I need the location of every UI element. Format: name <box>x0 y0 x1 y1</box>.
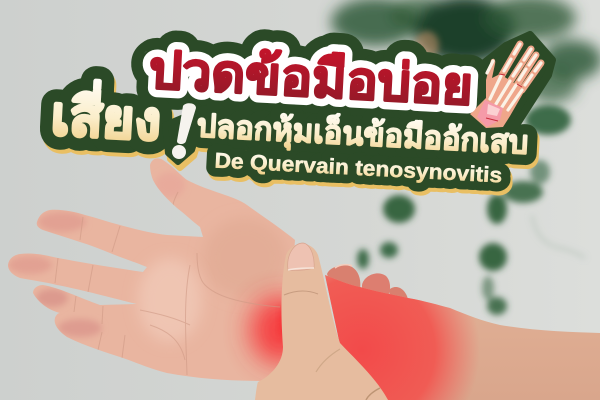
title line 2: condition: ปลอกหุ้มเอ็นข้อมืออักเสบ <box>196 105 529 164</box>
green sticker backing: ปวดข้อมือบ่อย <box>148 42 474 116</box>
exclamation mark <box>172 103 196 159</box>
gold drop shadow of sticker: ปลอกหุ้มเอ็นข้อมืออักเสบ <box>198 109 531 168</box>
title line 1: ปวดข้อมือบ่อย <box>148 42 474 116</box>
green sticker backing: เสี่ยง <box>49 77 163 152</box>
gold drop shadow of sticker: เสี่ยง <box>51 81 165 156</box>
gold drop shadow of sticker: De Quervain tenosynovitis <box>216 152 505 192</box>
title sticker <box>49 35 552 192</box>
gold drop shadow of sticker <box>51 81 531 192</box>
hand x-ray icon <box>470 44 541 128</box>
forearm with red inflammation glow <box>325 275 600 400</box>
thumbnail <box>288 243 314 270</box>
blurred plant foliage <box>331 0 600 315</box>
green sticker backing <box>49 35 552 188</box>
open palm with fingers <box>8 158 310 381</box>
title line 1: ปวดข้อมือบ่อย <box>148 42 474 116</box>
gripping hand: thumb over the wrist <box>255 243 388 400</box>
english subtitle: De Quervain tenosynovitis <box>214 148 503 188</box>
green sticker backing: De Quervain tenosynovitis <box>214 148 503 188</box>
green sticker backing: ปลอกหุ้มเอ็นข้อมืออักเสบ <box>196 105 529 164</box>
curled fingers behind the wrist <box>327 265 408 299</box>
title line 2: warning word: เสี่ยง <box>49 77 163 152</box>
